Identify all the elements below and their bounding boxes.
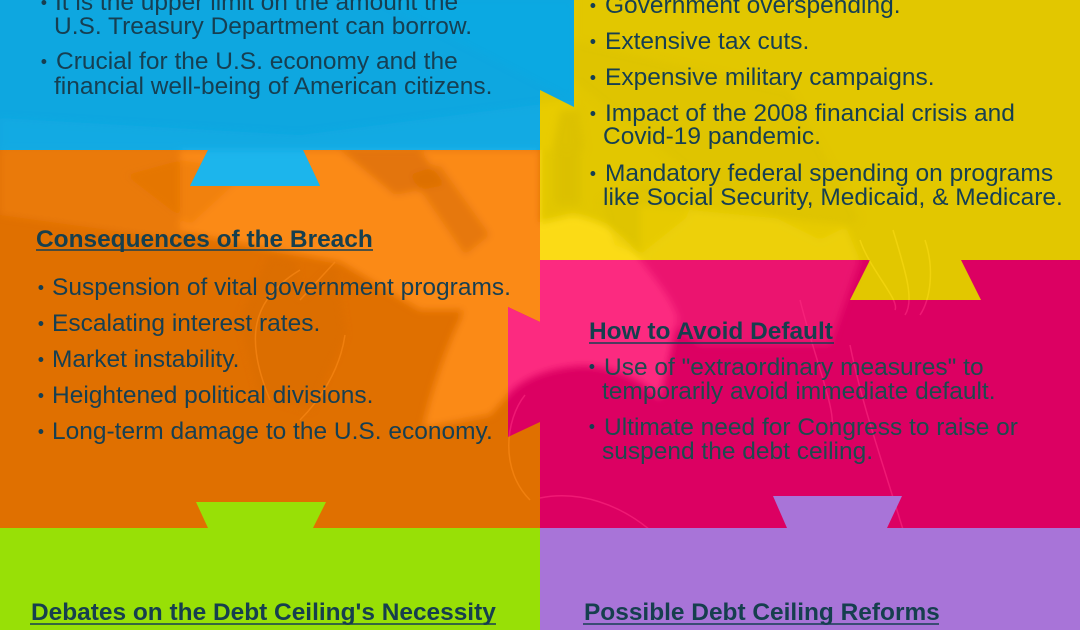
bullet list: definition: Crucial for the U.S. economy and the [56,48,458,75]
bullet list: consequences: • [38,314,44,334]
bullet list: causes: • [590,164,596,184]
panel: how to avoid default [508,260,1080,528]
bullet list: consequences: Escalating interest rates. [52,310,320,337]
bullet list: definition: financial well-being of American citizens. [54,73,492,100]
bullet list: causes: Impact of the 2008 financial crisis and [605,100,1015,127]
panel: debates on the debt ceiling's necessity [0,502,540,630]
bullet list: consequences: Long-term damage to the U.S. economy. [52,418,493,445]
bullet list: causes: like Social Security, Medicaid, & Medicare. [603,184,1063,211]
bullet list: causes: Mandatory federal spending on programs [605,160,1053,187]
heading: possible reforms: Possible Debt Ceiling Reforms [584,599,940,626]
bullet list: causes [590,0,1063,211]
bullet list: consequences: • [38,386,44,406]
bullet list: causes: Expensive military campaigns. [605,64,935,91]
panel: what is the debt ceiling [0,0,574,186]
bullet list: causes: • [590,68,596,88]
bullet list: avoid default: suspend the debt ceiling. [602,438,873,465]
bullet list: consequences: Suspension of vital government programs. [52,274,511,301]
bullet list: causes: Extensive tax cuts. [605,28,809,55]
heading: consequences of the breach: Consequences of the Breach [36,226,373,253]
panel: causes of the debt [540,0,1080,300]
panel: possible debt ceiling reforms [540,496,1080,630]
bullet list: consequences [38,274,511,445]
bullet list: causes: • [590,32,596,52]
bullet list: consequences: • [38,422,44,442]
bullet list: avoid default: Ultimate need for Congress to raise or [604,414,1018,441]
bullet list: definition [41,0,493,100]
bullet list: avoid default [589,354,1018,465]
bullet list: consequences: Heightened political divisions. [52,382,373,409]
bullet list: consequences: • [38,278,44,298]
bullet list: definition: U.S. Treasury Department can borrow. [54,13,472,40]
heading: how to avoid default: How to Avoid Default [589,318,833,345]
bullet list: avoid default: • [589,356,595,376]
bullet list: consequences: Market instability. [52,346,239,373]
heading: debates on necessity: Debates on the Debt Ceiling's Necessity [31,599,496,626]
panel: consequences of the breach [0,150,540,528]
bullet list: avoid default: temporarily avoid immediate default. [602,378,996,405]
bullet list: causes: • [590,104,596,124]
bullet list: consequences: • [38,350,44,370]
bullet list: causes: Covid-19 pandemic. [603,123,821,150]
bullet list: avoid default: Use of "extraordinary measures" to [604,354,984,381]
bullet list: definition: • [41,52,47,72]
bullet list: avoid default: • [589,416,595,436]
